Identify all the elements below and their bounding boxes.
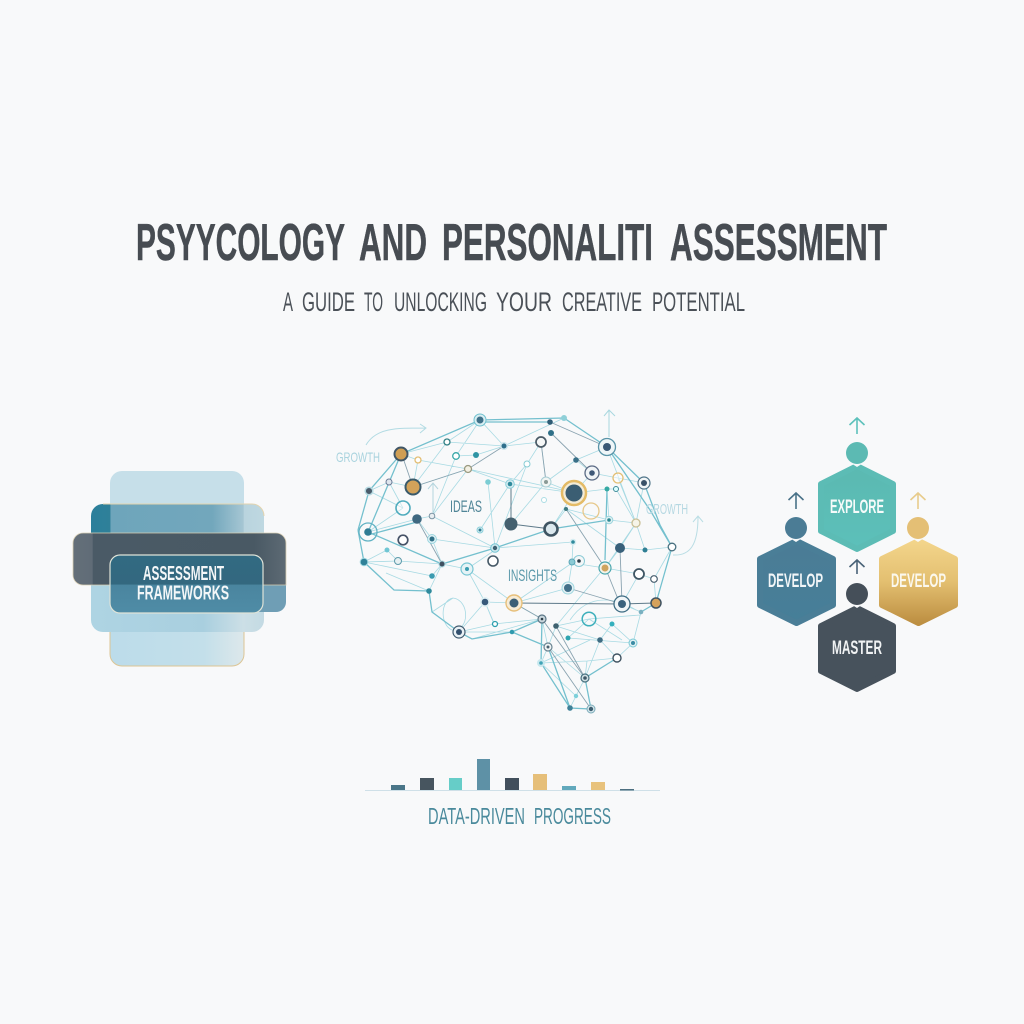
panel: assessment frameworks stacked cards — [73, 471, 286, 666]
title: ASSESSMENT — [670, 214, 887, 272]
bar chart: data-driven progress — [365, 759, 660, 791]
card: teal layer — [91, 504, 264, 632]
arrow: curved left growth — [366, 424, 426, 445]
arrow: develop gold up — [910, 493, 926, 509]
arrow: up beside ideas — [428, 483, 438, 513]
chart: brain network — [336, 410, 703, 713]
hexagon: develop blue — [760, 517, 833, 623]
hexagon: develop gold — [882, 517, 955, 623]
card: back light blue — [110, 471, 244, 666]
hexagon: develop blue: DEVELOP — [768, 571, 823, 592]
arrow: explore up — [850, 418, 864, 434]
subtitle: YOUR — [496, 287, 552, 317]
label: growth right: GROWTH — [646, 501, 688, 518]
label: frameworks: FRAMEWORKS — [137, 582, 229, 604]
label: assessment: ASSESSMENT — [143, 563, 224, 585]
node: gold large left — [394, 448, 408, 460]
card: front label — [110, 555, 263, 613]
subtitle: TO — [364, 287, 383, 317]
subtitle: CREATIVE — [562, 287, 642, 317]
hexagon: explore — [821, 442, 893, 549]
card: lower light section — [110, 632, 244, 666]
label: ideas: IDEAS — [450, 497, 482, 516]
node: gold hub — [562, 481, 586, 505]
chart caption: PROGRESS — [534, 803, 611, 829]
arrow: develop blue up — [788, 493, 804, 509]
label: growth left: GROWTH — [336, 449, 380, 465]
node: mixed small nodes — [359, 415, 676, 713]
card: dark band — [73, 533, 286, 585]
subtitle: GUIDE — [302, 287, 355, 317]
subtitle: POTENTIAL — [652, 287, 745, 317]
hexagon: develop gold: DEVELOP — [891, 571, 946, 592]
subtitle — [283, 287, 745, 317]
title: AND — [359, 214, 427, 272]
card: blue band — [240, 585, 286, 612]
chart caption: DATA-DRIVEN — [428, 803, 525, 829]
nodes — [359, 414, 676, 713]
subtitle: UNLOCKING — [394, 287, 487, 317]
panel: hexagon progression — [760, 418, 955, 689]
network: dark edges — [402, 422, 622, 709]
title: PERSONALITI — [442, 214, 653, 272]
network: main dark links — [511, 484, 656, 604]
network: strong edges — [358, 418, 672, 709]
arrow: up top right — [604, 410, 615, 437]
hexagon: master: MASTER — [832, 638, 882, 659]
hexagon: explore: EXPLORE — [830, 497, 884, 518]
hexagon: master — [821, 583, 893, 689]
network: light edges — [364, 418, 672, 708]
label: insights: INSIGHTS — [508, 566, 557, 585]
node: top ring — [474, 414, 486, 426]
title — [136, 214, 887, 272]
title: PSYYCOLOGY — [136, 214, 345, 272]
arrow: curved right growth — [673, 516, 703, 555]
subtitle: A — [283, 287, 293, 317]
node: gold large — [406, 480, 420, 494]
arrow: master up — [850, 560, 864, 574]
